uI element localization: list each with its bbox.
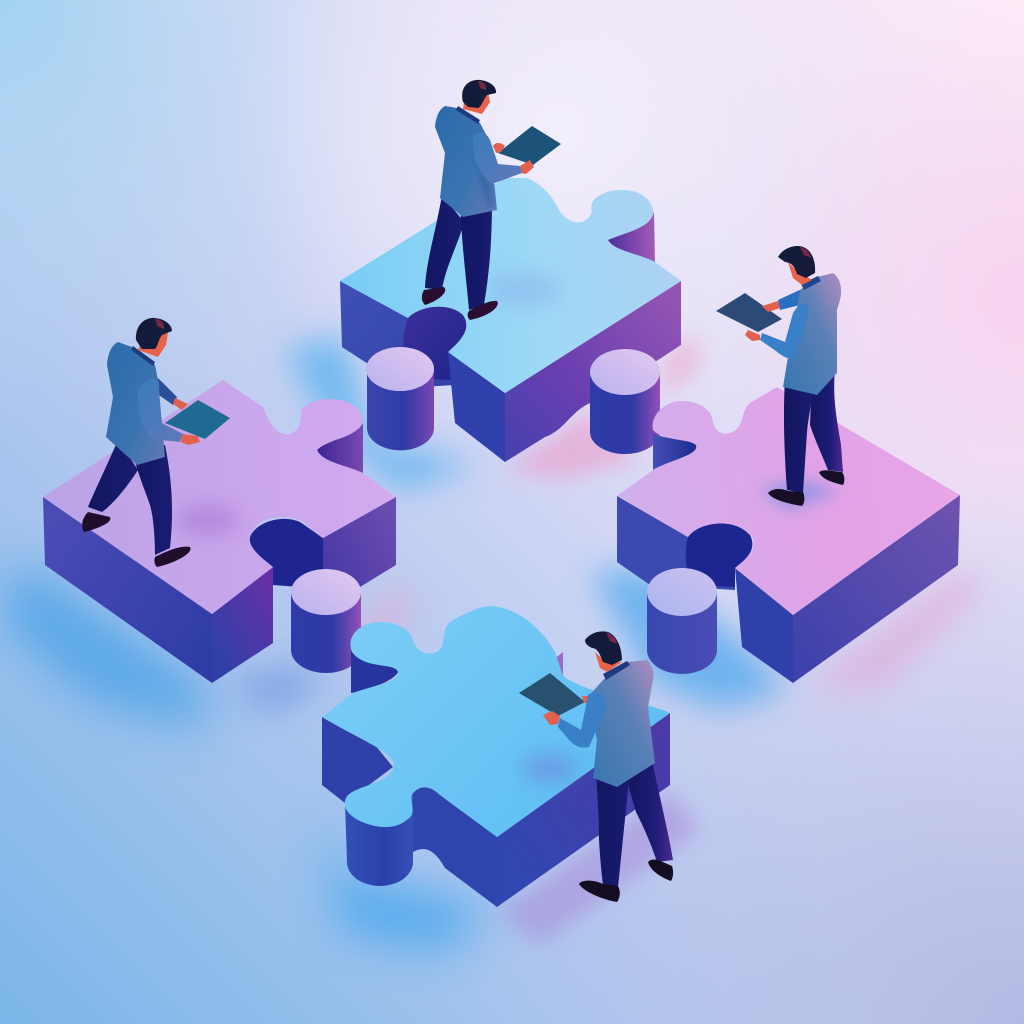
piece top surface [43, 380, 396, 614]
person soft shadow [760, 480, 840, 510]
puzzle piece: bottom (cyan) [322, 606, 670, 907]
hair highlight [606, 632, 617, 644]
piece front right face [212, 567, 273, 683]
front-left face [413, 787, 497, 907]
peg: top right [590, 349, 660, 454]
hair highlight [478, 81, 486, 90]
piece socket hole [403, 307, 466, 380]
collar [456, 106, 480, 124]
front leg [596, 770, 630, 887]
piece top surface [340, 178, 681, 393]
piece left face [43, 497, 212, 683]
hands [745, 301, 780, 341]
jacket [783, 273, 841, 395]
front leg [132, 445, 172, 555]
shoes [768, 470, 844, 506]
rear leg [425, 195, 464, 290]
knob side [608, 212, 655, 262]
sleeve [760, 304, 808, 359]
person soft shadow [176, 504, 240, 536]
piece right face [505, 281, 681, 462]
face [788, 262, 812, 285]
hair highlight [800, 247, 811, 258]
piece top surface [617, 387, 960, 615]
face [138, 333, 168, 357]
hair [585, 631, 622, 665]
peg: left [291, 569, 361, 673]
person: left [82, 318, 230, 567]
back arm [156, 378, 177, 405]
piece left face [617, 496, 735, 590]
piece left face [322, 717, 393, 803]
hair [778, 246, 815, 278]
tablet [716, 293, 782, 332]
peg: top left [366, 347, 434, 450]
knob side [653, 433, 696, 470]
piece right face [323, 497, 396, 590]
tablet [165, 400, 230, 439]
piece top surface [322, 606, 670, 837]
person soft shadow [487, 272, 563, 308]
front leg [784, 380, 815, 493]
piece left side face [340, 281, 455, 388]
sleeve [558, 692, 606, 748]
face [463, 92, 490, 114]
hands [543, 696, 588, 725]
hands [173, 398, 200, 445]
jacket [588, 660, 655, 787]
person: top [422, 80, 561, 320]
hair highlight [155, 318, 164, 329]
knob cylinder side [345, 793, 413, 886]
hands [493, 143, 534, 174]
piece socket hole [250, 519, 340, 590]
person: right [716, 246, 844, 506]
floor shadows [0, 335, 985, 950]
back arm [778, 288, 804, 310]
piece right face [497, 713, 670, 907]
shoes [579, 860, 673, 902]
knob side [317, 423, 363, 473]
rear leg [810, 370, 843, 472]
small purple sliver [553, 652, 563, 676]
peg: right [647, 568, 717, 674]
rear leg [625, 760, 673, 862]
collar [131, 346, 155, 366]
sleeve [473, 133, 522, 184]
person: bottom [519, 631, 673, 902]
tablet [498, 126, 561, 165]
sleeve [138, 379, 183, 442]
shoes [422, 287, 498, 320]
jacket fold shading [476, 150, 494, 208]
collar [603, 661, 630, 680]
back knob side [351, 648, 398, 693]
hair [462, 80, 496, 108]
tablet [519, 673, 585, 716]
jacket [106, 342, 165, 465]
puzzle piece: top (blue) [340, 178, 681, 462]
face [595, 652, 622, 672]
piece front face [448, 352, 505, 462]
shoes [82, 512, 191, 567]
piece right face [793, 495, 960, 683]
puzzle piece: right (pink) [617, 387, 960, 683]
piece socket hole [686, 523, 752, 587]
collar [801, 276, 821, 290]
person soft shadow [522, 754, 578, 782]
jacket [435, 106, 497, 217]
puzzle piece: left (lilac) [43, 380, 396, 683]
rear leg [88, 440, 138, 512]
hair [136, 318, 172, 349]
piece front face [735, 568, 793, 683]
front leg [460, 200, 492, 310]
